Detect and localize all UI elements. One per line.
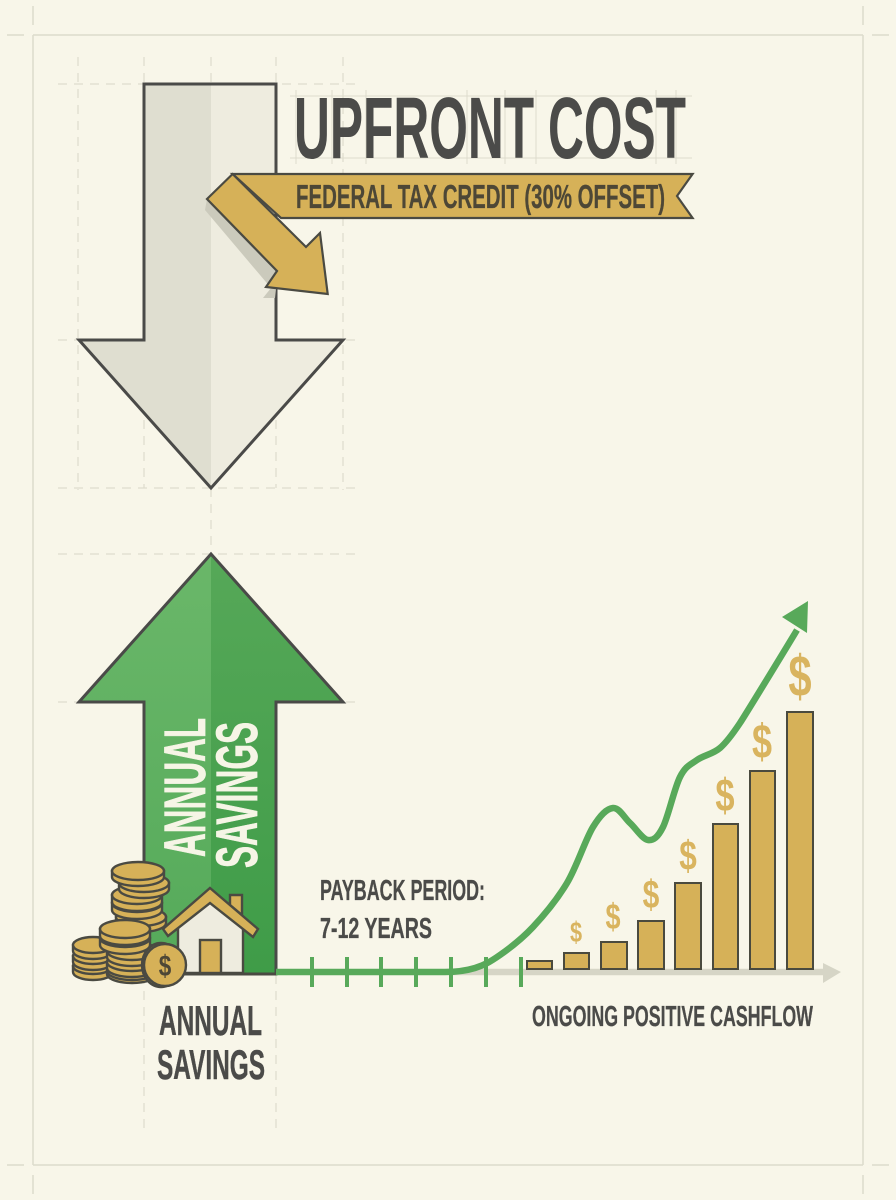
annual savings label: SAVINGS	[157, 1041, 265, 1088]
arrow label: ANNUAL	[153, 718, 218, 857]
arrow label: SAVINGS	[205, 722, 270, 868]
dollar signs above bars: $	[715, 769, 735, 821]
payback period label	[320, 875, 485, 945]
chart axis	[451, 963, 841, 983]
dollar signs above bars: $	[788, 643, 812, 709]
arrow label	[153, 718, 270, 868]
title	[290, 80, 692, 177]
dollar signs above bars: $	[570, 917, 582, 949]
icon: dollar coin	[142, 943, 186, 987]
callout: federal tax credit banner and arrow: FEDERAL TAX CREDIT (30% OFFSET)	[296, 178, 665, 215]
dollar signs above bars: $	[643, 873, 660, 917]
dollar signs above bars	[570, 643, 812, 949]
callout: federal tax credit banner and arrow	[205, 174, 693, 298]
icon: large up arrow for annual savings	[79, 554, 343, 974]
icon: house	[144, 888, 276, 974]
payback timeline and growth curve	[276, 601, 808, 987]
icon: coin stacks	[73, 862, 169, 983]
annual savings label: ANNUAL	[159, 997, 262, 1044]
payback period label: PAYBACK PERIOD:	[320, 875, 485, 907]
annual savings label	[157, 997, 265, 1088]
bar chart: ongoing cashflow	[527, 712, 813, 969]
dollar signs above bars: $	[605, 896, 621, 937]
payback period label: 7-12 YEARS	[320, 913, 432, 945]
icon: large down arrow for upfront cost	[79, 84, 343, 488]
dollar signs above bars: $	[752, 715, 772, 768]
icon: dollar coin: $	[159, 949, 171, 983]
dollar signs above bars: $	[679, 832, 697, 879]
